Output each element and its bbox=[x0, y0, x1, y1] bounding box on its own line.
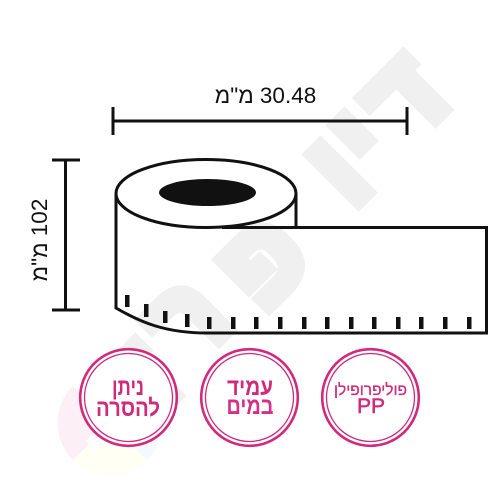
height dimension arrow bbox=[52, 160, 80, 310]
watermark: colour wheel logo bbox=[58, 386, 162, 475]
badge: water resistant bbox=[201, 349, 298, 446]
roll core hole bbox=[159, 179, 256, 206]
label gap marks bbox=[125, 295, 472, 329]
roll top face bbox=[116, 160, 296, 228]
roll side and label strip outline bbox=[116, 194, 486, 333]
height label: 102 מ"מ bbox=[27, 199, 52, 281]
watermark: brand name bbox=[67, 29, 472, 452]
watermark: brand name: ו bbox=[280, 114, 394, 228]
badge: polypropylene: PP bbox=[357, 395, 385, 418]
badge: polypropylene: פוליפרופילן bbox=[334, 381, 407, 399]
badge: removable: להסרה bbox=[96, 395, 160, 422]
width label: 30.48 מ"מ bbox=[215, 83, 316, 108]
watermark: brand name: ד bbox=[67, 315, 204, 452]
watermark: brand name: ד bbox=[335, 29, 472, 166]
badge: removable: ניתן bbox=[112, 374, 144, 401]
badge: water resistant: במים bbox=[226, 393, 274, 420]
badge: water resistant: עמיד bbox=[227, 374, 273, 401]
badge: polypropylene bbox=[322, 349, 419, 446]
badge: removable bbox=[80, 349, 177, 446]
watermark: brand name: י bbox=[304, 85, 418, 199]
width dimension arrow bbox=[113, 107, 407, 135]
watermark: brand name: ר bbox=[118, 252, 254, 388]
label roll illustration bbox=[116, 160, 486, 333]
watermark: brand name: פ bbox=[191, 190, 333, 332]
